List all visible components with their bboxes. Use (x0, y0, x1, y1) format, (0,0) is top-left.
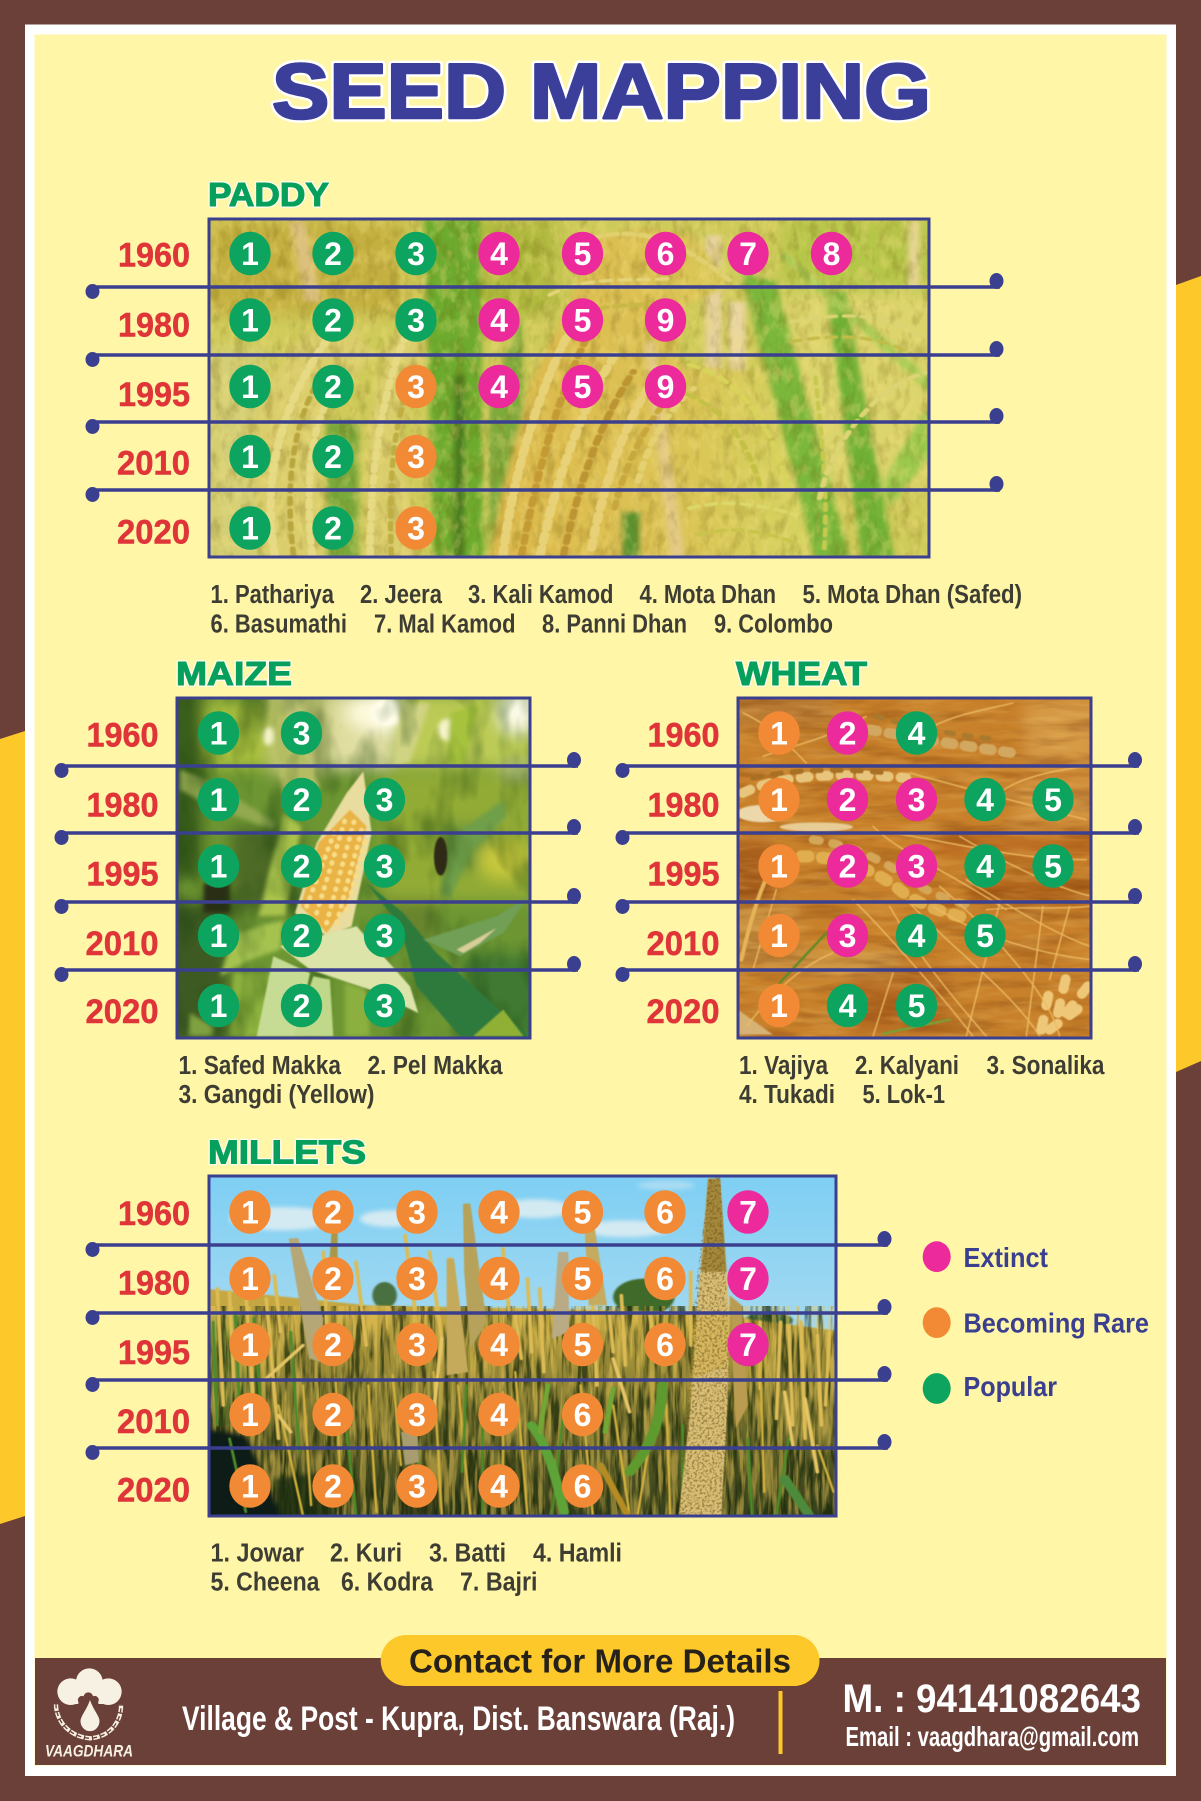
photo frame: wheat (738, 698, 1091, 1038)
markers: maize 1980: 1 (210, 782, 227, 818)
markers: wheat 1980: 1 (770, 782, 788, 818)
markers: millets 1980: 3 (408, 1261, 426, 1297)
year labels: wheat: 1960 (648, 716, 720, 754)
year labels: maize: 2020 (86, 993, 158, 1031)
divider lines: wheat (616, 752, 1142, 982)
markers: maize 1960: 1 (210, 716, 227, 752)
markers: paddy 1980: 3 (407, 302, 425, 338)
year labels: maize: 1980 (86, 786, 158, 824)
variety list: wheat: 1. Vajiya (739, 1052, 829, 1080)
markers: millets 2020: 3 (408, 1468, 426, 1504)
markers: paddy 2010: 3 (407, 439, 425, 475)
markers: millets 2010: 1 (241, 1397, 259, 1433)
photo: wheat ears (740, 700, 1090, 1036)
variety list: wheat (739, 1052, 1105, 1109)
variety list: paddy: 1. Pathariya (210, 581, 335, 609)
variety list: wheat: 2. Kalyani (855, 1052, 959, 1080)
markers: paddy 2010 (229, 435, 437, 478)
markers: millets 2010: 3 (408, 1397, 426, 1433)
markers: paddy 1960: 3 (407, 236, 425, 272)
markers: millets 1980: 7 (739, 1261, 757, 1297)
variety list: wheat: 4. Tukadi (739, 1081, 835, 1109)
markers: millets 1960: 4 (490, 1194, 508, 1230)
markers: paddy 1980: 4 (490, 302, 508, 338)
heading: maize: MAIZE (176, 655, 292, 692)
variety list: millets (210, 1540, 622, 1596)
markers: paddy 1995: 5 (574, 369, 591, 405)
markers: maize 1995: 2 (293, 848, 310, 884)
variety list: paddy: 2. Jeera (360, 581, 443, 609)
markers: wheat 2020 (758, 984, 937, 1027)
variety list: paddy: 8. Panni Dhan (542, 610, 687, 638)
markers: millets 1960: 6 (656, 1194, 674, 1230)
year labels: paddy: 2010 (117, 444, 190, 482)
markers: wheat 1980: 2 (839, 782, 856, 818)
markers: paddy 1960: 8 (823, 236, 840, 272)
markers: millets 1995: 6 (656, 1327, 674, 1363)
year labels: millets: 1995 (118, 1334, 190, 1372)
variety list: maize (178, 1052, 503, 1109)
markers: millets 2020: 6 (574, 1468, 591, 1504)
photo frame: maize (177, 698, 530, 1038)
markers: wheat 1980 (758, 778, 1074, 821)
year labels: maize: 1995 (86, 856, 158, 894)
markers: wheat 1995: 5 (1044, 848, 1062, 884)
markers: millets 2010: 6 (574, 1397, 591, 1433)
year labels: maize: 1960 (86, 716, 158, 754)
footer band (35, 1635, 1166, 1765)
variety list: maize: 2. Pel Makka (368, 1052, 503, 1080)
heading: millets: MILLETS (208, 1134, 366, 1170)
year labels: millets: 1960 (118, 1195, 190, 1233)
markers: paddy 1995: 3 (407, 369, 425, 405)
legend item: popular: Popular (964, 1371, 1057, 1402)
markers: paddy 2020: 2 (324, 510, 342, 546)
year labels: maize: 2010 (86, 925, 158, 963)
markers: millets 1980: 5 (574, 1261, 591, 1297)
panel: maize (54, 655, 581, 1109)
markers: millets 1995: 2 (324, 1327, 342, 1363)
markers: wheat 1960 (758, 711, 937, 755)
year labels: millets: 2010 (117, 1403, 190, 1441)
markers: maize 2010: 3 (376, 918, 393, 954)
markers: millets 2010 (229, 1393, 603, 1436)
heading: paddy: PADDY (208, 176, 329, 213)
markers: millets 2010: 2 (324, 1397, 342, 1433)
markers: paddy 1980: 5 (574, 302, 591, 338)
legend item: extinct (923, 1241, 1048, 1273)
variety list: paddy: 6. Basumathi (210, 610, 347, 638)
markers: paddy 2020: 1 (241, 510, 259, 546)
markers: maize 1980 (198, 778, 405, 821)
variety list: millets: 7. Bajri (460, 1568, 538, 1596)
photo: maize cob (178, 700, 528, 1036)
markers: paddy 1980: 1 (241, 302, 259, 338)
legend item: popular (923, 1371, 1057, 1404)
variety list: paddy: 3. Kali Kamod (468, 581, 614, 609)
markers: millets 2020: 1 (241, 1468, 259, 1504)
markers: millets 1995: 7 (739, 1327, 757, 1363)
markers: paddy 1995: 2 (324, 369, 342, 405)
legend (923, 1241, 1149, 1404)
markers: millets 2020 (229, 1464, 603, 1508)
markers: wheat 1995: 4 (976, 848, 994, 884)
markers: millets 1995: 5 (574, 1327, 591, 1363)
markers: wheat 2010: 4 (908, 918, 926, 954)
variety list: wheat: 5. Lok-1 (862, 1081, 945, 1109)
divider (778, 1691, 782, 1754)
legend item: becoming rare: Becoming Rare (964, 1308, 1149, 1338)
callout: contact pill (381, 1635, 820, 1686)
markers: millets 2010: 4 (490, 1397, 508, 1433)
markers: wheat 2020: 1 (770, 988, 788, 1024)
panel: wheat (616, 655, 1142, 1109)
markers: millets 1980: 2 (324, 1261, 342, 1297)
markers: wheat 2020: 4 (839, 988, 857, 1024)
markers: maize 2020 (198, 984, 405, 1027)
markers: wheat 1980: 4 (976, 782, 994, 818)
markers: wheat 2010 (758, 914, 1006, 957)
markers: paddy 1995 (229, 365, 686, 408)
markers: millets 1980 (229, 1257, 769, 1300)
markers: paddy 1980 (229, 298, 686, 342)
markers: paddy 1980: 2 (324, 302, 342, 338)
heading: maize: MAIZE (176, 655, 292, 692)
markers: maize 2020: 2 (293, 988, 310, 1024)
markers: wheat 1960: 4 (908, 716, 926, 752)
markers: millets 1995: 3 (408, 1327, 426, 1363)
year labels: maize (86, 716, 158, 1031)
markers: wheat 1995: 3 (908, 848, 925, 884)
icon: vaagdhara logo: VAAGDHARA (45, 1742, 133, 1760)
heading: paddy: PADDY (208, 176, 329, 213)
markers: maize 2010 (198, 914, 405, 957)
markers: paddy 1995: 4 (490, 369, 508, 405)
markers: maize 1995 (198, 844, 405, 888)
markers: wheat 2020: 5 (908, 988, 925, 1024)
markers: millets 1980: 4 (490, 1261, 508, 1297)
photo: paddy field (210, 220, 928, 556)
markers: paddy 1980: 9 (657, 302, 674, 338)
markers: wheat 1995: 1 (770, 848, 788, 884)
variety list: maize: 3. Gangdi (Yellow) (178, 1081, 374, 1109)
variety list: millets: 1. Jowar (210, 1540, 304, 1568)
markers: paddy 1960: 6 (657, 236, 674, 272)
markers: millets 1995 (229, 1323, 769, 1366)
markers: paddy 2020: 3 (407, 510, 425, 546)
markers: millets 1995: 1 (241, 1327, 259, 1363)
markers: wheat 1980: 3 (908, 782, 925, 818)
legend item: extinct: Extinct (964, 1242, 1048, 1273)
divider lines: paddy (86, 273, 1004, 502)
markers: millets 1960: 2 (324, 1194, 342, 1230)
year labels: paddy: 2020 (117, 514, 190, 552)
markers: paddy 1995: 1 (241, 369, 259, 405)
markers: millets 1960: 1 (241, 1194, 259, 1230)
photo frame: paddy (209, 219, 929, 557)
photo frame: millets (209, 1176, 836, 1516)
markers: wheat 2010: 1 (770, 918, 788, 954)
year labels: paddy: 1980 (118, 306, 190, 344)
markers: paddy 1960: 5 (574, 236, 591, 272)
divider lines: maize (54, 752, 581, 982)
markers: maize 1995: 1 (210, 848, 227, 884)
markers: paddy 1960: 7 (739, 236, 757, 272)
heading: wheat: WHEAT (736, 655, 867, 692)
year labels: millets: 1980 (118, 1264, 190, 1302)
variety list: maize: 1. Safed Makka (178, 1052, 342, 1080)
markers: paddy 2010: 2 (324, 439, 342, 475)
markers: millets 2020: 2 (324, 1468, 342, 1504)
address: Village & Post - Kupra, Dist. Banswara (Raj.) (182, 1700, 735, 1738)
callout: contact pill: Contact for More Details (409, 1642, 791, 1680)
markers: wheat 1995: 2 (839, 848, 856, 884)
photo: millet field (205, 1172, 846, 1520)
year labels: wheat: 2010 (646, 925, 720, 963)
title: SEED MAPPING (272, 47, 931, 135)
markers: millets 1960: 5 (574, 1194, 591, 1230)
markers: maize 1995: 3 (376, 848, 393, 884)
variety list: millets: 4. Hamli (533, 1540, 622, 1568)
markers: paddy 1960: 1 (241, 236, 259, 272)
year labels: wheat: 1995 (648, 856, 720, 894)
heading: millets: MILLETS (208, 1134, 366, 1170)
variety list: millets: 2. Kuri (330, 1540, 402, 1568)
markers: maize 2020: 1 (210, 988, 227, 1024)
variety list: wheat: 3. Sonalika (986, 1052, 1105, 1080)
variety list: paddy: 4. Mota Dhan (640, 581, 776, 609)
year labels: wheat: 1980 (648, 786, 720, 824)
variety list: millets: 6. Kodra (341, 1568, 434, 1596)
panel: millets (86, 1134, 892, 1596)
markers: maize 2020: 3 (376, 988, 393, 1024)
year labels: wheat (646, 716, 720, 1031)
variety list: millets: 5. Cheena (210, 1568, 320, 1596)
year labels: millets: 2020 (117, 1472, 190, 1510)
markers: millets 1960: 7 (739, 1194, 757, 1230)
markers: wheat 1995 (758, 844, 1074, 888)
markers: maize 1980: 3 (376, 782, 393, 818)
markers: wheat 1960: 1 (770, 716, 788, 752)
markers: millets 1980: 6 (656, 1261, 674, 1297)
markers: wheat 1980: 5 (1044, 782, 1062, 818)
markers: millets 2020: 4 (490, 1468, 508, 1504)
markers: maize 2010: 1 (210, 918, 227, 954)
markers: paddy 1995: 9 (657, 369, 674, 405)
markers: millets 1980: 1 (241, 1261, 259, 1297)
markers: paddy 1960 (229, 232, 852, 275)
markers: paddy 1960: 4 (490, 236, 508, 272)
year labels: wheat: 2020 (646, 993, 720, 1031)
panel: paddy (86, 176, 1022, 638)
markers: millets 1960: 3 (408, 1194, 426, 1230)
year labels: millets (117, 1195, 190, 1510)
markers: paddy 2020 (229, 506, 437, 550)
title: SEED MAPPING (272, 47, 931, 135)
heading: wheat: WHEAT (736, 655, 867, 692)
markers: maize 1960: 3 (293, 716, 310, 752)
year labels: paddy: 1960 (118, 236, 190, 274)
markers: wheat 2010: 5 (976, 918, 994, 954)
markers: millets 1960 (229, 1190, 769, 1234)
markers: wheat 1960: 2 (839, 716, 856, 752)
year labels: paddy (117, 236, 190, 552)
markers: paddy 2010: 1 (241, 439, 259, 475)
year labels: paddy: 1995 (118, 376, 190, 414)
markers: paddy 1960: 2 (324, 236, 342, 272)
markers: maize 2010: 2 (293, 918, 310, 954)
variety list: millets: 3. Batti (429, 1540, 506, 1568)
variety list: paddy: 9. Colombo (714, 610, 833, 638)
variety list: paddy (210, 581, 1022, 638)
variety list: paddy: 7. Mal Kamod (374, 610, 516, 638)
phone number: M. : 94141082643 (842, 1677, 1141, 1721)
markers: maize 1980: 2 (293, 782, 310, 818)
markers: wheat 2010: 3 (839, 918, 856, 954)
markers: maize 1960 (198, 711, 322, 755)
divider lines: millets (86, 1231, 892, 1460)
variety list: paddy: 5. Mota Dhan (Safed) (802, 581, 1022, 609)
markers: millets 1995: 4 (490, 1327, 508, 1363)
icon: vaagdhara logo (45, 1668, 133, 1760)
